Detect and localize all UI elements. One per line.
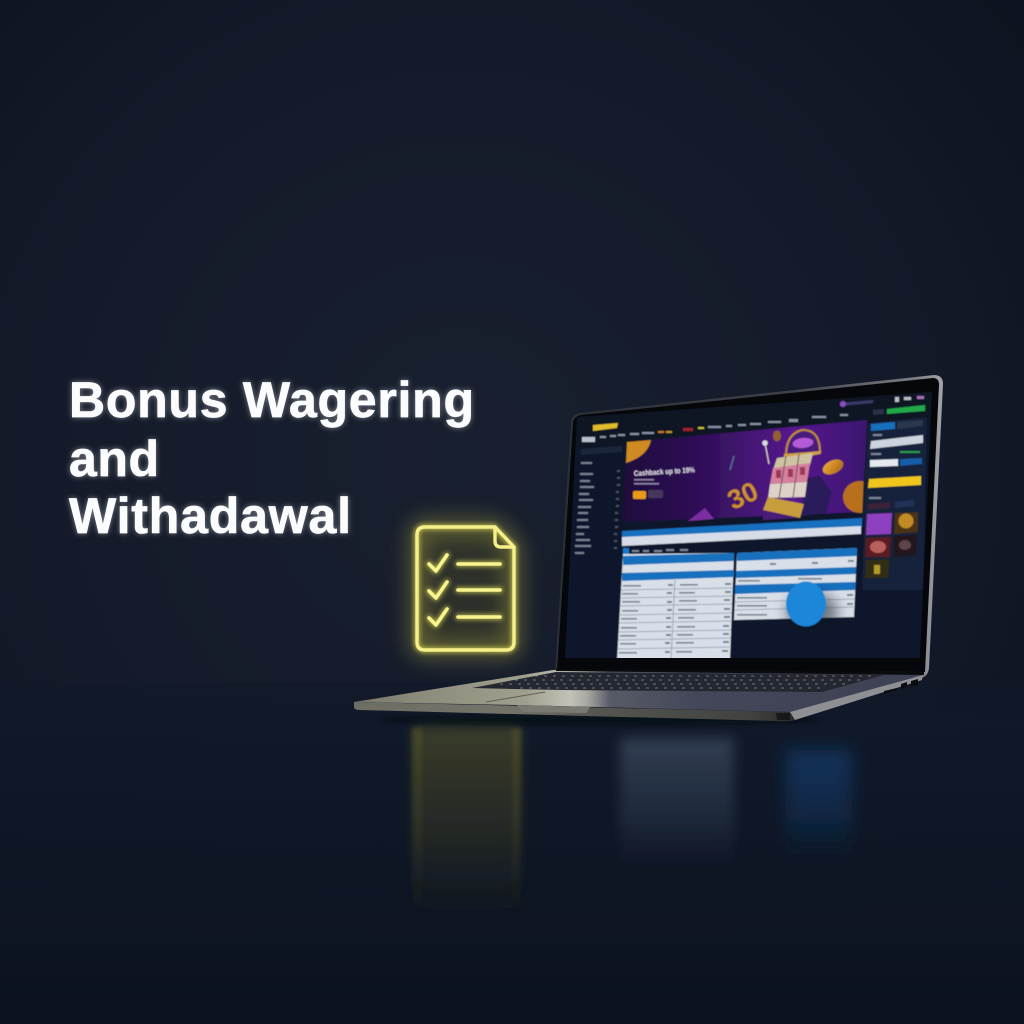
game tile: purple: [866, 513, 892, 535]
folded corner: [495, 527, 514, 547]
banner shard: [730, 456, 734, 470]
login button: [873, 409, 884, 415]
banner grey button: [648, 490, 663, 498]
table body: [734, 548, 857, 620]
laptop front face: [354, 702, 795, 721]
table section header two: [735, 582, 856, 594]
banner background: [622, 420, 867, 522]
reflection: checklist right edge: [512, 728, 521, 913]
left odds table: [617, 553, 734, 660]
bet slip tab active: [871, 422, 895, 431]
bet slip panel: [862, 417, 927, 590]
slot machine base: [763, 497, 804, 518]
front corner shade: [776, 713, 790, 720]
reel symbols: [776, 467, 805, 478]
banner orange button: [633, 491, 646, 499]
dark tile highlight: [899, 540, 911, 550]
red tile highlight: [870, 541, 886, 553]
register button: [887, 405, 925, 414]
screen background: [560, 385, 940, 665]
top navigation bar: [646, 399, 932, 440]
banner headline: Cashback up to 19%: [634, 465, 695, 478]
banner triangle: [688, 508, 714, 521]
slot machine arch: [786, 430, 820, 456]
reflection: checklist left edge: [412, 728, 422, 913]
document outline: [417, 527, 514, 650]
gold wheel sun: [898, 514, 914, 528]
top right icons: [895, 396, 924, 402]
table blue header: [623, 553, 734, 565]
check marks: [429, 555, 447, 625]
reel row bottom: [768, 482, 807, 498]
sidebar rows: [575, 462, 594, 554]
stake input: [870, 459, 898, 467]
slot machine dark body: [800, 476, 832, 516]
reel row top: [773, 453, 813, 470]
logo badge: [593, 423, 618, 431]
title: Bonus Wagering: [69, 372, 474, 428]
right bet slip: [862, 417, 927, 590]
game tile: dark: [894, 535, 917, 557]
laptop deck: [354, 670, 924, 712]
table section header: [736, 567, 856, 578]
lid frame: [555, 375, 943, 678]
match header bar: [622, 518, 862, 540]
screen: [560, 385, 940, 665]
floor reflections: [412, 726, 852, 921]
sidebar search: [581, 446, 622, 455]
banner coin right: [842, 480, 864, 514]
nav items: [600, 414, 848, 438]
icon outer halo: [417, 527, 514, 650]
table row lines: [618, 580, 733, 660]
dark tab strip: [623, 548, 688, 554]
banner subtext: [634, 479, 659, 484]
casino banner: [622, 420, 877, 522]
title: and: [69, 431, 159, 487]
laptop: [354, 375, 943, 724]
table row lines: [735, 599, 855, 610]
front notch: [517, 705, 590, 713]
game tile: gold wheel: [894, 512, 918, 534]
coin text 30: 30: [723, 476, 763, 516]
table section header: [622, 570, 734, 581]
logo: [582, 437, 595, 442]
lever knob: [762, 440, 768, 446]
reflection: blue circle: [786, 750, 852, 860]
icon inner tint: [417, 527, 514, 650]
hinge shadow: [556, 669, 924, 675]
icon glow: [417, 527, 514, 650]
small coin: [773, 430, 781, 442]
left sidebar: [575, 446, 622, 554]
match white row: [622, 526, 861, 546]
banner edge cover: [862, 470, 867, 520]
game tile: red dice: [865, 537, 891, 557]
yellow bet button: [868, 476, 921, 488]
infographic scene: [64, 112, 943, 888]
table cell labels: [619, 583, 731, 654]
account avatar: [840, 401, 846, 407]
silver side chamfer: [790, 675, 923, 720]
yellow tile figure: [874, 565, 880, 574]
table cell labels: [737, 560, 854, 616]
sidebar counters: [614, 470, 620, 549]
bet slip tab inactive: [897, 420, 923, 429]
trackpad edge: [486, 692, 545, 702]
account chip: [840, 400, 873, 406]
blue circle shadow: [786, 592, 838, 632]
keyboard keys: [500, 676, 872, 688]
table body: [617, 553, 734, 660]
reflective floor: [0, 682, 1024, 1024]
slot lever: [765, 443, 769, 464]
banner coin left: [626, 440, 651, 463]
reel row middle: [770, 463, 810, 484]
slot machine: [762, 430, 846, 520]
screen content: [560, 385, 940, 665]
right odds table: [734, 548, 857, 620]
reel separators: [779, 454, 799, 498]
place button blue: [900, 458, 922, 466]
lid bezel: [557, 378, 939, 672]
chip red: [868, 502, 890, 510]
reflection: laptop screen: [620, 738, 734, 868]
laptop shadow: [380, 716, 820, 724]
slot machine sign: [792, 437, 814, 449]
gold coin: [820, 456, 846, 478]
game tile: yellow: [865, 559, 889, 578]
title: Withadawal: [69, 488, 351, 544]
slot machine sign shelf: [784, 451, 821, 458]
reflection: checklist icon: [414, 726, 520, 921]
table blue header: [737, 548, 857, 561]
chip blue: [895, 500, 914, 508]
bet input: [870, 435, 923, 449]
side ports: [884, 679, 918, 694]
base dark foot: [763, 510, 799, 520]
keyboard well: [472, 672, 884, 692]
icon: neon checklist document: [417, 527, 514, 650]
checklist lines: [458, 564, 500, 617]
section labels: [869, 434, 920, 499]
blue circle: [786, 582, 826, 626]
